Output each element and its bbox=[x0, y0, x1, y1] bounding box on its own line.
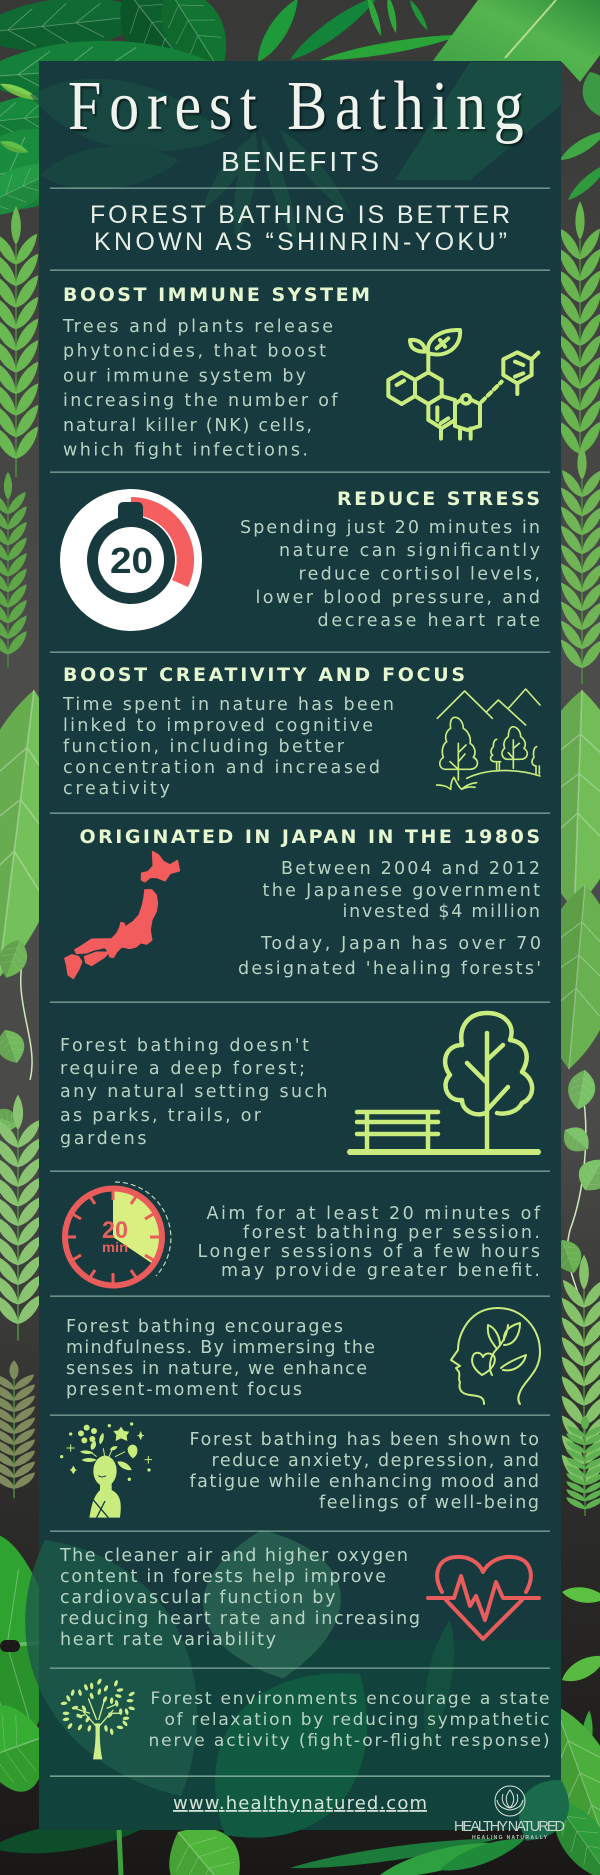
panel: mindfulness bbox=[66, 1308, 540, 1404]
title: Forest Bathing bbox=[68, 68, 524, 145]
divider bbox=[50, 270, 550, 271]
text block: content in forests help improve bbox=[60, 1567, 386, 1587]
text block: our immune system by bbox=[63, 366, 306, 386]
divider bbox=[50, 1414, 550, 1416]
text block: Trees and plants release bbox=[62, 317, 333, 337]
text block bbox=[59, 1546, 420, 1650]
divider bbox=[50, 1296, 550, 1297]
text block: Between 2004 and 2012 bbox=[281, 859, 540, 879]
text block: The cleaner air and higher oxygen bbox=[59, 1546, 408, 1566]
icon: 20 minute timer: 20 bbox=[102, 1217, 128, 1244]
icon: 20 minute stopwatch: 20 bbox=[110, 540, 153, 581]
text block: the Japanese government bbox=[262, 881, 540, 901]
text block: phytoncides, that boost bbox=[63, 342, 326, 362]
text block: Forest bathing encourages bbox=[66, 1317, 343, 1337]
intro text: FOREST BATHING IS BETTER bbox=[90, 201, 510, 229]
brand name: HEALTHY NATURED bbox=[454, 1819, 565, 1835]
text block bbox=[198, 1204, 541, 1281]
icon: head with heart and leaves bbox=[451, 1308, 540, 1404]
text block: of relaxation by reducing sympathetic bbox=[164, 1710, 550, 1730]
divider bbox=[50, 1776, 550, 1777]
icon: person with flowers bbox=[60, 1422, 152, 1518]
text block: heart rate variability bbox=[60, 1630, 276, 1650]
text block bbox=[148, 1689, 550, 1751]
text block: function, including better bbox=[63, 737, 345, 757]
text block: require a deep forest; bbox=[60, 1059, 305, 1079]
text block: natural killer (NK) cells, bbox=[63, 416, 312, 436]
text block bbox=[62, 695, 394, 799]
text block: gardens bbox=[60, 1129, 146, 1149]
heading: BOOST IMMUNE SYSTEM bbox=[63, 284, 370, 306]
divider bbox=[50, 472, 550, 473]
text block: Spending just 20 minutes in bbox=[240, 518, 540, 538]
text block: fatigue while enhancing mood and bbox=[190, 1472, 539, 1492]
logo: healthy natured bbox=[454, 1786, 565, 1841]
heading: ORIGINATED IN JAPAN IN THE 1980S bbox=[80, 826, 540, 848]
text block bbox=[238, 934, 541, 979]
divider bbox=[50, 1668, 550, 1669]
text block: invested $4 million bbox=[342, 902, 540, 922]
text block: Time spent in nature has been bbox=[62, 695, 394, 715]
icon: mountains and trees bbox=[437, 689, 540, 789]
icon: park bench and tree bbox=[350, 1013, 538, 1152]
icon: heart with pulse line bbox=[428, 1557, 539, 1639]
divider bbox=[50, 1530, 550, 1532]
text block: creativity bbox=[63, 779, 170, 799]
text block: decrease heart rate bbox=[318, 611, 540, 631]
divider bbox=[50, 188, 550, 189]
text block: Today, Japan has over 70 bbox=[260, 934, 541, 954]
text block: senses in nature, we enhance bbox=[66, 1359, 367, 1379]
top-centre blades bbox=[250, 0, 464, 67]
text block: nerve activity (fight-or-flight response) bbox=[148, 1731, 550, 1751]
text block bbox=[60, 1036, 328, 1149]
panel: reduce stress bbox=[60, 488, 540, 631]
text block: increasing the number of bbox=[63, 391, 338, 411]
text block: reduce cortisol levels, bbox=[298, 564, 540, 584]
text block: Aim for at least 20 minutes of bbox=[206, 1204, 541, 1224]
right margin ferns and leaves bbox=[526, 201, 600, 1516]
text block bbox=[262, 859, 540, 922]
divider bbox=[50, 812, 550, 814]
panel: mood and well-being bbox=[60, 1422, 539, 1518]
text block: reducing heart rate and increasing bbox=[60, 1609, 420, 1629]
panel: boost immune system bbox=[62, 284, 538, 460]
text block: linked to improved cognitive bbox=[63, 716, 373, 736]
subtitle: BENEFITS bbox=[221, 146, 379, 177]
text block bbox=[66, 1317, 375, 1400]
divider bbox=[50, 1002, 550, 1003]
panel: faint leaves showing through at bottom bbox=[0, 1505, 582, 1875]
intro text: KNOWN AS “SHINRIN-YOKU” bbox=[94, 228, 507, 256]
text block: any natural setting such bbox=[60, 1082, 328, 1102]
panel: no deep forest needed bbox=[60, 1013, 538, 1152]
heading: BOOST CREATIVITY AND FOCUS bbox=[63, 664, 465, 686]
top-left tropical leaves bbox=[0, 0, 245, 230]
divider bbox=[50, 652, 550, 653]
divider bbox=[50, 1170, 550, 1172]
panel: faint leaves showing through at top bbox=[23, 62, 561, 247]
top-right banana leaf bbox=[432, 0, 600, 204]
text block: Longer sessions of a few hours bbox=[198, 1242, 540, 1262]
icon: lotus in circle bbox=[495, 1786, 525, 1816]
panel: relaxation bbox=[61, 1678, 549, 1759]
text block: feelings of well-being bbox=[319, 1493, 539, 1513]
text block: which fight infections. bbox=[63, 440, 308, 460]
intro text bbox=[90, 201, 510, 256]
text block: reduce anxiety, depression, and bbox=[212, 1451, 539, 1471]
text block: lower blood pressure, and bbox=[256, 588, 540, 608]
panel: aim for 20 minutes bbox=[65, 1182, 541, 1286]
text block: mindfulness. By immersing the bbox=[66, 1338, 375, 1358]
text block: designated 'healing forests' bbox=[238, 959, 541, 979]
heading: REDUCE STRESS bbox=[337, 488, 540, 510]
text block bbox=[240, 518, 540, 631]
icon: 20 minute timer: min bbox=[102, 1239, 128, 1255]
text block: nature can significantly bbox=[279, 541, 540, 561]
text block: may provide greater benefit. bbox=[221, 1261, 540, 1281]
panel: boost creativity and focus bbox=[62, 664, 540, 799]
icon: map of Japan bbox=[65, 852, 179, 978]
icon: 20 minute timer bbox=[65, 1182, 171, 1286]
text block: cardiovascular function by bbox=[60, 1588, 336, 1608]
icon: molecule with sprout bbox=[388, 330, 538, 439]
text block: present-moment focus bbox=[66, 1380, 302, 1400]
text block: Forest environments encourage a state bbox=[150, 1689, 550, 1709]
text block bbox=[190, 1430, 539, 1513]
icon: leafy tree bbox=[61, 1678, 135, 1759]
text block: concentration and increased bbox=[63, 758, 380, 778]
text block: Forest bathing has been shown to bbox=[190, 1430, 539, 1450]
text block: forest bathing per session. bbox=[243, 1223, 540, 1243]
panel: cardiovascular function bbox=[59, 1546, 539, 1650]
icon: 20 minute stopwatch bbox=[60, 489, 202, 631]
left margin ferns and leaves bbox=[0, 206, 83, 1498]
text block: Forest bathing doesn't bbox=[60, 1036, 309, 1056]
text block: as parks, trails, or bbox=[60, 1106, 262, 1126]
text block bbox=[62, 317, 338, 460]
bottom foliage bbox=[0, 1529, 600, 1875]
website link: www.healthynatured.com bbox=[173, 1793, 427, 1814]
panel: originated in japan bbox=[65, 826, 541, 979]
brand tagline: HEALING NATURALLY bbox=[472, 1835, 548, 1841]
